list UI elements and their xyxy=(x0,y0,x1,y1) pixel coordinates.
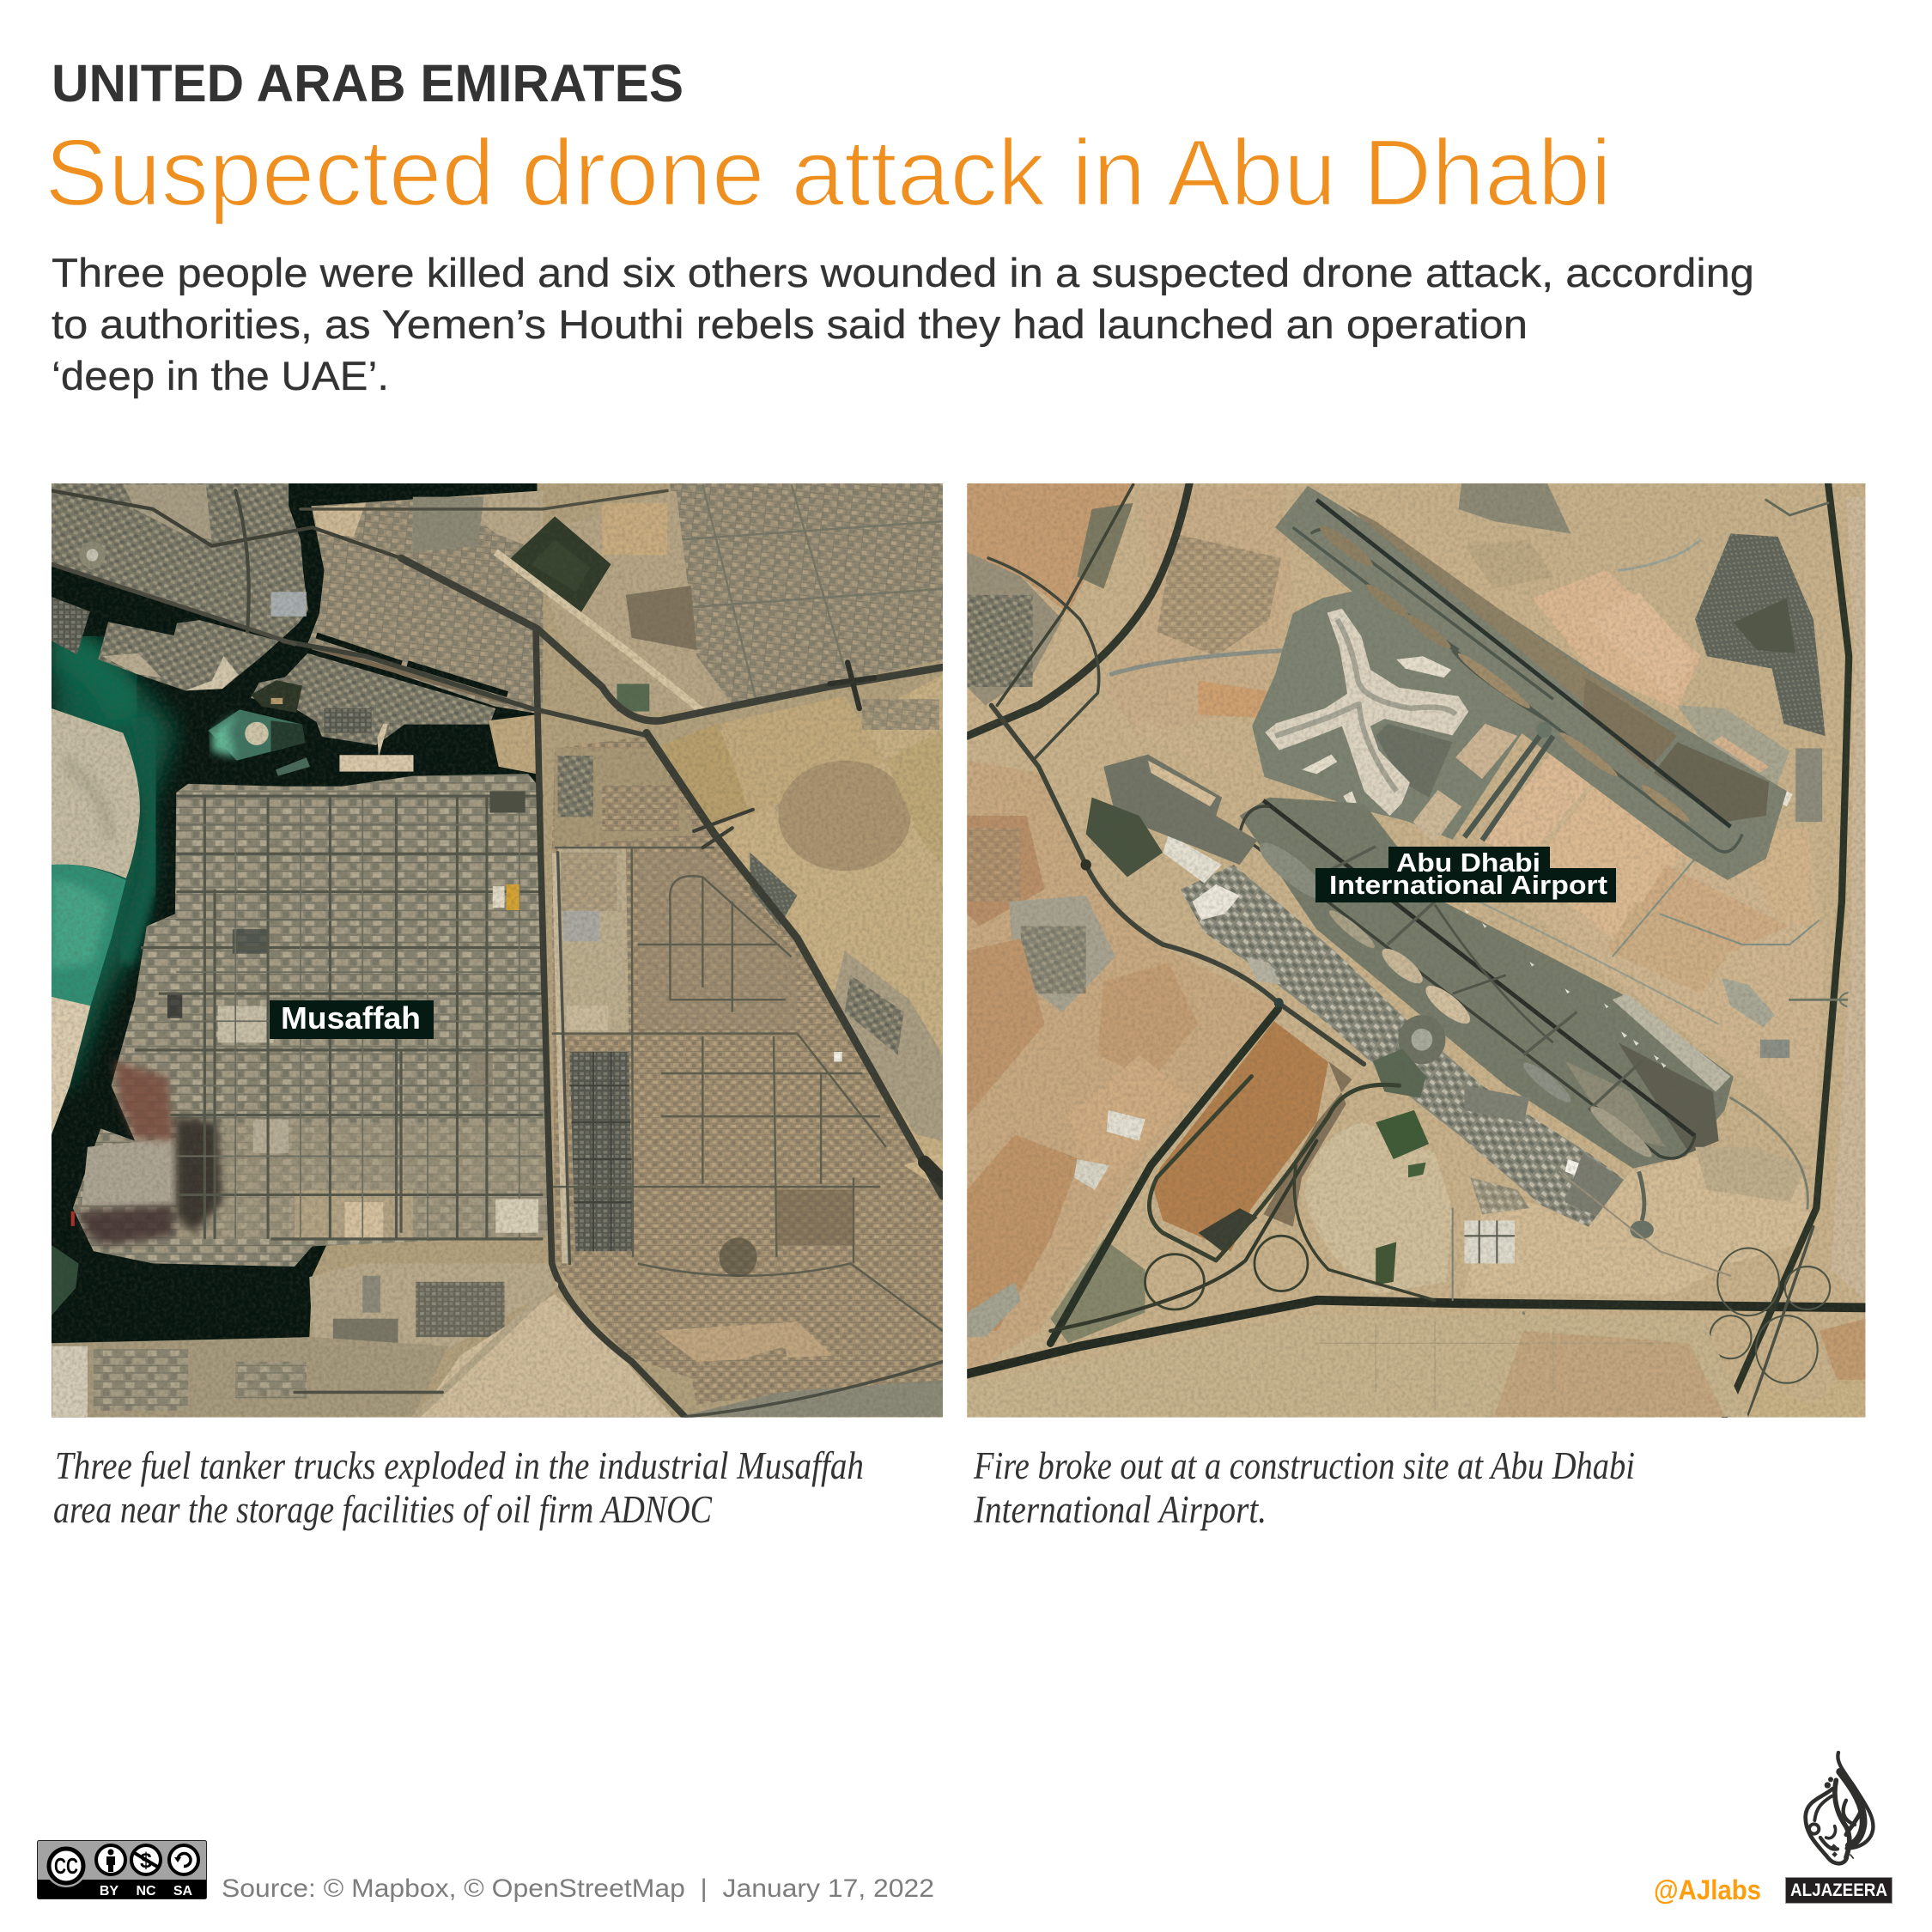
highways xyxy=(52,490,943,1417)
AJLabs handle: @AJlabs xyxy=(1654,1874,1761,1905)
apron around the new terminal xyxy=(1252,589,1527,840)
caption: airport: Fire broke out at a construction site at Abu Dhabi xyxy=(973,1444,1635,1487)
intro paragraph: ‘deep in the UAE’. xyxy=(52,353,389,398)
green sea tints xyxy=(52,638,176,1085)
source line: Source: © Mapbox, © OpenStreetMap | January 17, 2022 xyxy=(222,1874,934,1903)
Musaffah road grid xyxy=(135,796,543,1239)
south land of canal xyxy=(251,653,495,745)
brown field xyxy=(1154,1021,1328,1251)
east residential xyxy=(552,736,943,1416)
sand island left xyxy=(52,708,140,878)
top left land xyxy=(52,483,308,641)
new terminal X xyxy=(1265,609,1468,816)
caption: airport: International Airport. xyxy=(973,1488,1267,1531)
SW land xyxy=(967,761,1281,1374)
intro paragraph: Three people were killed and six others wounded in a suspected drone attack, according xyxy=(52,250,1754,295)
peninsula xyxy=(98,620,279,690)
NE village xyxy=(1695,533,1826,736)
water base xyxy=(52,483,537,1346)
NE desert xyxy=(661,675,943,1196)
harbour mole and causeway xyxy=(377,724,388,757)
runway 1 band xyxy=(1275,486,1787,880)
city islet xyxy=(52,597,90,654)
canal xyxy=(317,635,507,695)
east desert and taxi fields xyxy=(1482,748,1826,1134)
icon: Al Jazeera calligraphic logo xyxy=(1806,1753,1873,1863)
teal shallows xyxy=(52,865,126,1005)
west parking block xyxy=(1103,755,1257,865)
icon: Creative Commons BY-NC-SA badge: SA xyxy=(173,1884,193,1899)
south runway complex xyxy=(1240,798,1734,1169)
caption: airport xyxy=(973,1444,1635,1531)
logo wordmark: ALJAZEERA: ALJAZEERA xyxy=(1790,1880,1887,1900)
NW orange land xyxy=(967,483,1133,613)
reef island xyxy=(208,709,305,761)
panel: airport satellite map xyxy=(967,483,1865,1418)
caption: Musaffah: Three fuel tanker trucks exploded in the industrial Musaffah xyxy=(55,1444,864,1487)
icon: Creative Commons BY-NC-SA badge: CC xyxy=(54,1853,78,1879)
park and hills south xyxy=(1304,1122,1453,1294)
icon: Creative Commons BY-NC-SA badge: BY xyxy=(100,1884,118,1899)
south desert strip xyxy=(967,1314,1748,1417)
terminal strip buildings SW side xyxy=(1181,865,1630,1227)
grain overlay xyxy=(52,483,943,1418)
grain overlay xyxy=(967,483,1865,1418)
burn scar and dark patches xyxy=(175,1116,222,1233)
caption: Musaffah: area near the storage facilities of oil firm ADNOC xyxy=(53,1488,713,1531)
base land xyxy=(52,483,943,1418)
Musaffah industrial area xyxy=(73,774,548,1267)
base land xyxy=(967,483,1865,1418)
midfield islands xyxy=(1377,943,1427,989)
panel: Musaffah satellite map xyxy=(52,483,943,1418)
map label: Abu Dhabi International Airport: International Airport xyxy=(1329,870,1607,900)
top right desert xyxy=(1370,483,1826,742)
east edge sand xyxy=(1831,497,1865,1300)
icon: Creative Commons BY-NC-SA badge xyxy=(38,1841,206,1899)
icon: Creative Commons BY-NC-SA badge: $ xyxy=(140,1849,152,1873)
highways and ring roads xyxy=(967,483,1865,1416)
kicker heading: UNITED ARAB EMIRATES xyxy=(52,54,683,112)
main title: Suspected drone attack in Abu Dhabi xyxy=(45,120,1612,226)
map label: Abu Dhabi International Airport: Abu Dhabi xyxy=(1396,848,1540,878)
intro paragraph: to authorities, as Yemen’s Houthi rebels said they had launched an operation xyxy=(52,301,1528,347)
garden island xyxy=(251,680,302,713)
central grid roads xyxy=(552,847,943,1331)
intro paragraph xyxy=(52,250,1754,398)
dark central grid xyxy=(569,1052,633,1251)
map label: Abu Dhabi International Airport xyxy=(1315,847,1616,902)
caption: Musaffah xyxy=(53,1444,864,1531)
south industrial and desert xyxy=(309,1263,555,1349)
sand islands beside taxiways xyxy=(1455,724,1517,779)
north land east of creek xyxy=(307,490,543,714)
map label: Musaffah: Musaffah xyxy=(281,1000,421,1036)
golf and centre strip xyxy=(537,490,732,716)
south east desert xyxy=(1464,1153,1814,1294)
aircraft on apron xyxy=(1464,909,1666,1068)
top right grid suburb xyxy=(670,483,943,704)
icon: Creative Commons BY-NC-SA badge: NC xyxy=(136,1884,156,1899)
